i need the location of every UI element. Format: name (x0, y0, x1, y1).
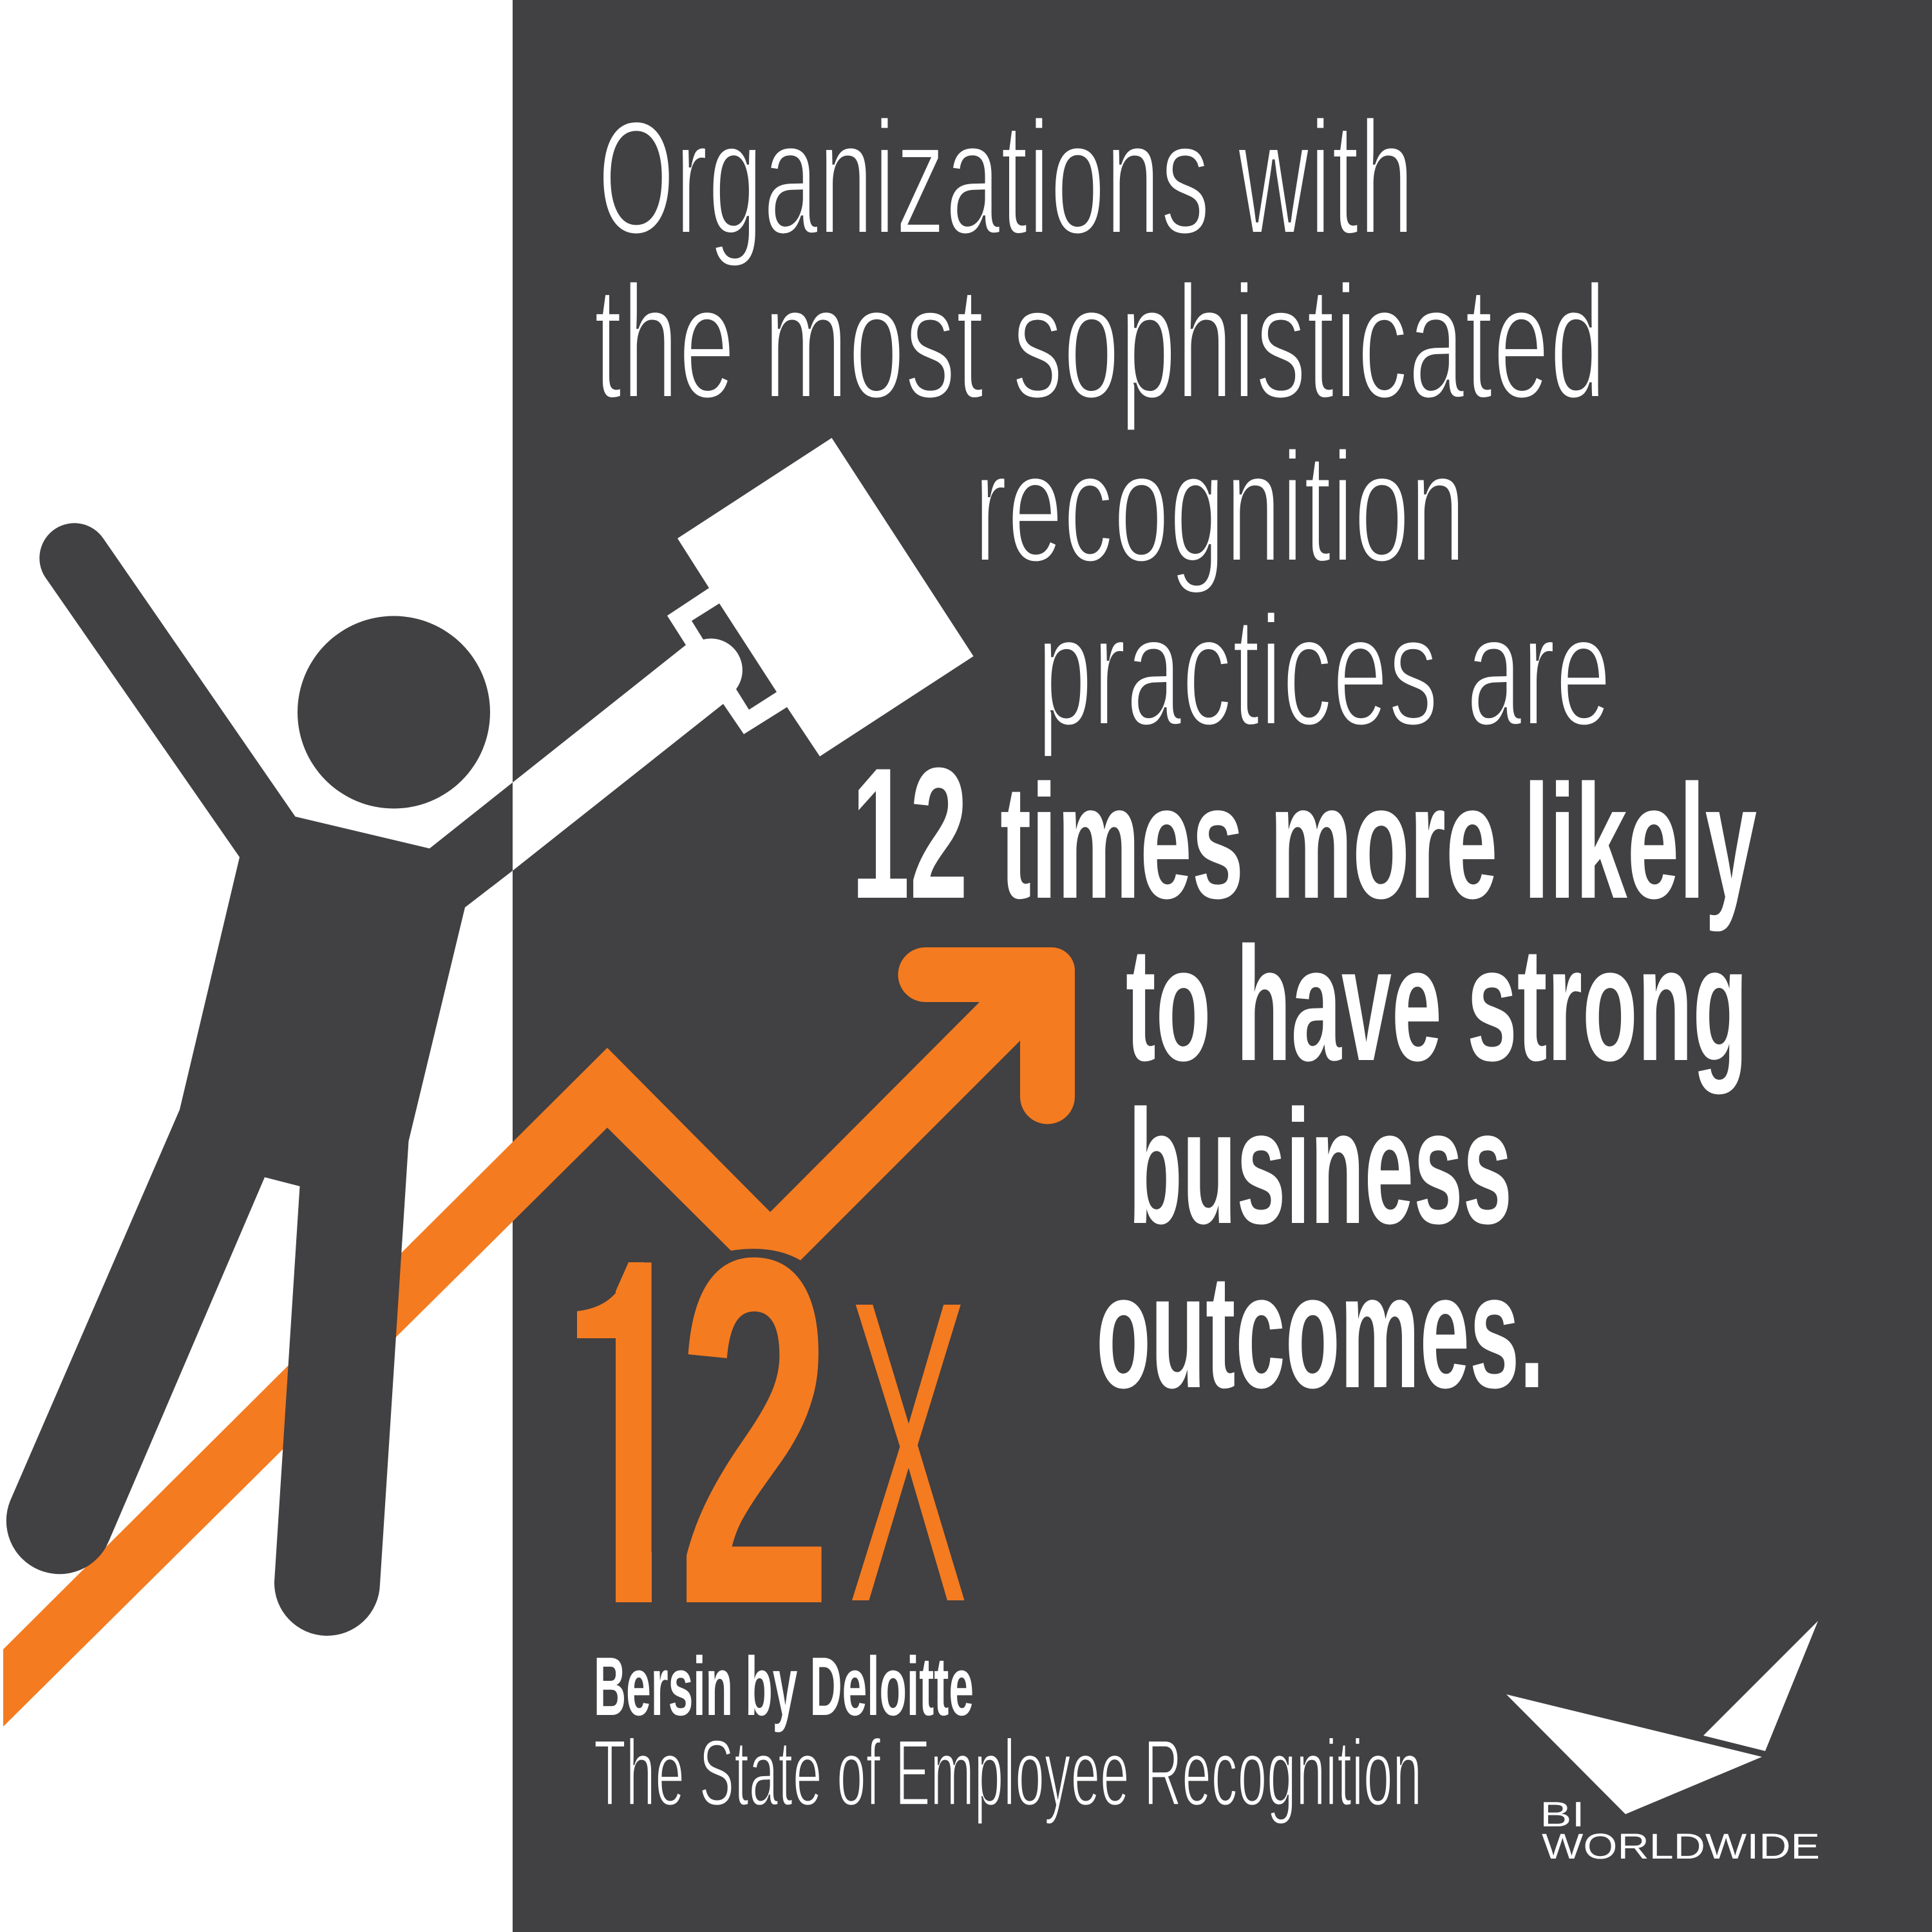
panel: white left background (0, 0, 513, 1932)
panel: dark right background (513, 0, 1932, 1932)
orange rising arrow (3, 947, 1075, 1727)
logo wordmark (1540, 1794, 1820, 1866)
figure head (298, 616, 490, 809)
source citation: Bersin by Deloitte (594, 1640, 974, 1733)
heading: bold statement text: 12 (851, 729, 968, 938)
heading: light statement text: recognition (974, 419, 1466, 595)
source citation (594, 1640, 1422, 1825)
heading: light statement text: Organizations with (598, 88, 1414, 269)
figure body (6, 523, 513, 1636)
heading: bold statement text: outcomes. (1096, 1241, 1544, 1422)
logo mark: small wing (1703, 1621, 1818, 1751)
logo: BI Worldwide (1506, 1621, 1820, 1866)
logo mark: large wing (1506, 1694, 1762, 1814)
big stat: 12X (577, 1257, 965, 1602)
heading: light statement text (594, 88, 1611, 759)
big stat: 12X: 2 (677, 1155, 833, 1707)
big stat: 12X: 1 (552, 1155, 701, 1707)
heading: bold statement text (851, 729, 1757, 1422)
heading: bold statement text: business (1128, 1077, 1512, 1258)
logo wordmark: BI (1540, 1794, 1585, 1834)
icon: person figure holding gavel (6, 438, 974, 1636)
text: X (846, 1209, 970, 1695)
logo wordmark: WORLDWIDE (1542, 1826, 1820, 1866)
heading: light statement text: practices are (1037, 582, 1611, 759)
gavel and forearm (513, 438, 974, 871)
